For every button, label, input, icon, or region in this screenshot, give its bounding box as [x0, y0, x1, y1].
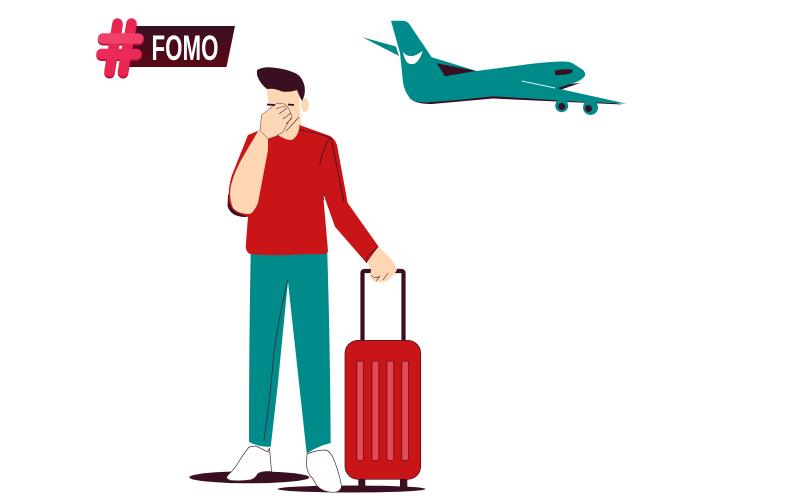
suitcase ribs: [357, 361, 409, 460]
ground shadow left: [189, 471, 309, 483]
ear: [301, 98, 309, 112]
banner background: [126, 26, 235, 67]
man: [227, 67, 397, 492]
badge: #FOMO: [102, 24, 235, 73]
forearm: [230, 128, 268, 214]
wing highlight: [522, 81, 555, 88]
suitcase: [345, 271, 421, 487]
suitcase shell: [345, 340, 421, 479]
suitcase handle: [362, 271, 404, 342]
suitcase wheels: [358, 477, 407, 487]
tail swoosh: [403, 51, 423, 64]
jumper seams: [300, 130, 378, 263]
trousers: [249, 253, 331, 454]
hand on face: [260, 103, 292, 139]
plane body: [391, 21, 627, 104]
neck and face: [266, 84, 301, 140]
airplane: [362, 21, 627, 115]
jumper: [228, 125, 378, 263]
badge text: FOMO: [152, 29, 218, 68]
eyes: [267, 104, 294, 106]
right shoe: [306, 450, 342, 492]
rear wing shadow: [437, 63, 476, 76]
rear stabilizer: [362, 37, 399, 56]
hashtag icon: [102, 24, 138, 73]
hair: [257, 67, 305, 101]
plane shadow underside: [408, 83, 622, 104]
hand on handle: [368, 246, 397, 282]
finger lines: [276, 107, 299, 131]
cockpit window: [555, 69, 573, 75]
sleeve shadow: [228, 190, 250, 217]
left shoe: [227, 446, 272, 481]
landing gear: [555, 99, 598, 115]
ground shadow right: [278, 486, 426, 492]
trouser crease: [264, 280, 288, 440]
gripping fingers: [371, 273, 388, 281]
